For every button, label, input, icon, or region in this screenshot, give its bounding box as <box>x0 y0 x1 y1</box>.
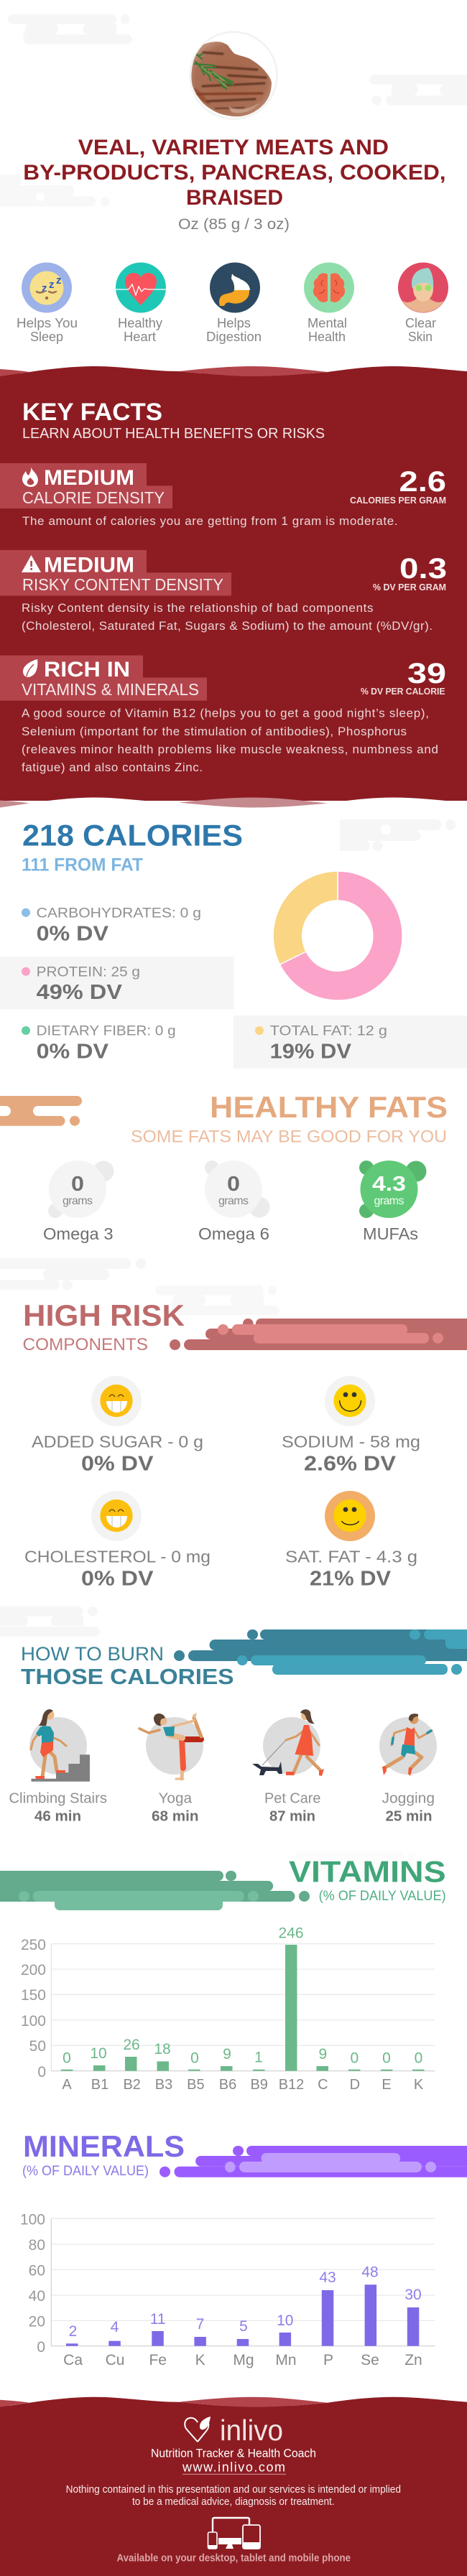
calories heading: 218 CALORIES <box>22 818 243 852</box>
title: BY-PRODUCTS, PANCREAS, COOKED, <box>23 161 446 185</box>
benefit: helps you sleep: Helps You <box>17 315 78 330</box>
bar chart: vitamins: 0 <box>190 2050 199 2067</box>
title: BRAISED <box>186 186 283 210</box>
background cloud: above burn section <box>0 1606 100 1636</box>
bar chart: vitamins: B5 <box>187 2077 205 2093</box>
bar chart: vitamins: 200 <box>21 1962 46 1979</box>
vitamins and minerals block: fatigue) and also contains Zinc. <box>22 761 203 774</box>
activity labels: 68 min <box>152 1809 198 1825</box>
activity labels: Climbing Stairs <box>9 1791 107 1807</box>
bar chart: minerals: Mg <box>233 2352 254 2368</box>
activity labels <box>9 1791 435 1825</box>
key facts subheading: LEARN ABOUT HEALTH BENEFITS OR RISKS <box>22 426 325 442</box>
decorative band: high risk <box>170 1319 467 1350</box>
benefit: healthy heart <box>116 263 166 344</box>
benefit: mental health: Mental <box>308 315 347 330</box>
bar chart: minerals: K <box>195 2352 205 2368</box>
calorie density block: CALORIE DENSITY <box>22 488 165 507</box>
calorie density block: MEDIUM <box>44 466 134 490</box>
benefit: helps you sleep: Sleep <box>30 329 63 344</box>
bar chart: vitamins: B9 <box>250 2077 268 2093</box>
availability note: Available on your desktop, tablet and mobile phone <box>116 2553 351 2565</box>
bar chart: vitamins: 10 <box>90 2045 107 2062</box>
macro: carbohydrates <box>22 906 201 945</box>
benefit: healthy heart: Heart <box>124 329 156 344</box>
fat: omega 6: Omega 6 <box>198 1224 269 1243</box>
disclaimer: Nothing contained in this presentation and our services is intended or implied <box>66 2484 401 2496</box>
bar chart: vitamins: K <box>414 2077 424 2093</box>
bar chart: vitamins: 0 <box>382 2050 391 2067</box>
decorative band: vitamins <box>0 1871 310 1910</box>
calorie density block: 2.6 <box>399 466 446 498</box>
risk: cholesterol: CHOLESTEROL - 0 mg <box>24 1548 211 1566</box>
benefit: clear skin <box>398 263 448 344</box>
benefit: helps you sleep: z <box>56 274 62 287</box>
bar chart: vitamins: 1 <box>254 2050 263 2066</box>
macro: carbohydrates: CARBOHYDRATES: 0 g <box>37 906 201 921</box>
benefit: mental health: Health <box>308 329 346 344</box>
bar chart: minerals: 5 <box>239 2318 248 2335</box>
macro: protein: PROTEIN: 25 g <box>37 964 140 980</box>
risky content density block <box>0 550 447 633</box>
macro: dietary fiber: 0% DV <box>37 1040 109 1063</box>
benefit: healthy heart: Healthy <box>118 315 163 330</box>
activity labels: Jogging <box>382 1791 435 1807</box>
fat: omega 6: 0 <box>227 1173 240 1196</box>
background cloud: right of high risk <box>155 1285 279 1316</box>
minerals heading: MINERALS <box>23 2129 185 2163</box>
risk: sodium <box>282 1376 420 1475</box>
vitamins subheading: (% OF DAILY VALUE) <box>319 1889 446 1904</box>
bar chart: vitamins: B3 <box>155 2077 172 2093</box>
tagline: Nutrition Tracker & Health Coach <box>151 2447 316 2460</box>
disclaimer <box>66 2484 401 2508</box>
vitamins and minerals block: 39 <box>407 658 446 689</box>
calorie density block: CALORIES PER GRAM <box>350 495 446 506</box>
bar chart: vitamins: A <box>62 2077 72 2093</box>
bar chart: vitamins: 0 <box>63 2050 71 2067</box>
calorie density block: The amount of calories you are getting from 1 gram is moderate. <box>22 514 398 528</box>
activity labels: Yoga <box>158 1791 193 1807</box>
vitamins heading: VITAMINS <box>289 1855 446 1889</box>
key facts heading: KEY FACTS <box>22 399 162 426</box>
risk: added sugar: ADDED SUGAR - 0 g <box>32 1433 203 1451</box>
macro: total fat: TOTAL FAT: 12 g <box>270 1024 387 1039</box>
macro: total fat <box>234 1015 467 1069</box>
activity: pet care <box>252 1709 324 1776</box>
bar chart: vitamins: 9 <box>223 2046 231 2063</box>
macro: total fat: 19% DV <box>270 1040 352 1063</box>
activity: yoga <box>139 1713 203 1779</box>
bar chart: vitamins: C <box>318 2077 328 2093</box>
risk: saturated fat <box>285 1491 417 1590</box>
risky content density block: MEDIUM <box>44 554 134 577</box>
benefit: clear skin: Clear <box>405 315 436 330</box>
bar chart: minerals: 4 <box>111 2319 119 2335</box>
vitamins and minerals block: VITAMINS & MINERALS <box>22 680 199 699</box>
bar chart: minerals: 60 <box>29 2262 45 2279</box>
burn heading: HOW TO BURN <box>21 1643 164 1665</box>
bar chart: vitamins: 246 <box>278 1925 304 1941</box>
burn heading <box>21 1643 234 1689</box>
bar chart: vitamins: B2 <box>123 2077 141 2093</box>
activity labels: 25 min <box>385 1809 433 1825</box>
bar chart: minerals: Ca <box>63 2352 83 2368</box>
risky content density block: % DV PER GRAM <box>373 582 446 592</box>
risk: sodium: 2.6% DV <box>304 1452 397 1475</box>
bar chart: minerals: 48 <box>361 2264 379 2281</box>
fat: omega 3: 0 <box>71 1173 84 1196</box>
fat: MUFAs: grams <box>374 1195 404 1207</box>
bar chart: minerals: 40 <box>29 2288 45 2305</box>
risk: cholesterol: 0% DV <box>81 1567 154 1590</box>
macro: protein: 49% DV <box>37 981 123 1004</box>
bar chart: vitamins: B6 <box>219 2077 236 2093</box>
activity: jogging <box>379 1714 437 1776</box>
serving size: Oz (85 g / 3 oz) <box>178 216 290 233</box>
benefit: helps you sleep: z <box>49 279 55 291</box>
background cloud: vitamins <box>295 1851 419 1882</box>
bar chart: minerals: 30 <box>404 2287 422 2303</box>
bar chart: minerals: Zn <box>404 2352 422 2368</box>
high risk heading: HIGH RISK <box>23 1298 185 1332</box>
vitamins and minerals block: (releaves minor health problems like muscle weakness, numbness and <box>22 743 438 756</box>
bar chart: minerals: 0 <box>37 2339 45 2356</box>
bar chart: minerals: Fe <box>149 2352 167 2368</box>
bar chart: minerals <box>20 2212 435 2368</box>
background cloud: calories <box>340 819 456 851</box>
activity labels: Pet Care <box>264 1791 320 1807</box>
calorie density block <box>0 463 446 528</box>
bar chart: minerals: Se <box>361 2352 379 2368</box>
risky content density block: RISKY CONTENT DENSITY <box>22 575 223 594</box>
risk: cholesterol <box>24 1491 211 1590</box>
fat: omega 6: grams <box>218 1195 249 1207</box>
risky content density block: Risky Content density is the relationship of bad components <box>22 601 374 615</box>
macro: protein <box>0 957 234 1010</box>
bar chart: vitamins: 0 <box>415 2050 422 2067</box>
fat: omega 3 <box>43 1161 114 1243</box>
vitamins and minerals block <box>0 656 446 774</box>
title <box>23 136 446 210</box>
bar chart: vitamins: 50 <box>29 2038 46 2055</box>
bar chart: minerals: 100 <box>20 2212 45 2228</box>
background cloud: top left <box>8 14 132 45</box>
logo: inlivo: inlivo <box>220 2414 283 2447</box>
logo: inlivo <box>185 2414 283 2447</box>
disclaimer: to be a medical advice, diagnosis or treatment. <box>132 2496 335 2508</box>
activity labels: 87 min <box>269 1809 315 1825</box>
activity labels: 46 min <box>34 1809 81 1825</box>
fat: omega 6 <box>198 1161 270 1243</box>
fat: MUFAs: MUFAs <box>363 1224 418 1243</box>
benefit: helps you sleep: z <box>42 282 47 294</box>
risky content density block: (Cholesterol, Saturated Fat, Sugars & Sodium) to the amount (%DV/gr). <box>22 619 433 633</box>
bar chart: minerals: 7 <box>196 2316 204 2333</box>
title: VEAL, VARIETY MEATS AND <box>78 136 389 159</box>
bar chart: vitamins: 250 <box>21 1937 46 1953</box>
activity: climbing stairs <box>29 1709 90 1782</box>
risk: added sugar: 0% DV <box>81 1452 154 1475</box>
background cloud: left of high risk <box>0 1258 146 1290</box>
benefit: helps digestion: Digestion <box>206 329 262 344</box>
fat: omega 3: Omega 3 <box>43 1224 114 1243</box>
donut chart <box>273 871 402 1000</box>
panel: footer <box>0 2397 467 2576</box>
bar chart: minerals: Mn <box>275 2352 297 2368</box>
bar chart: minerals: Cu <box>106 2352 124 2368</box>
healthy fats subheading: SOME FATS MAY BE GOOD FOR YOU <box>131 1127 447 1147</box>
bar chart: vitamins: 150 <box>21 1987 46 2004</box>
panel: key facts <box>0 366 467 819</box>
bar chart: minerals: 43 <box>319 2269 336 2286</box>
benefit: clear skin: Skin <box>408 329 433 344</box>
bar chart: vitamins: B12 <box>279 2077 304 2093</box>
fat: MUFAs <box>359 1161 427 1243</box>
website: www.inlivo.com <box>182 2460 285 2475</box>
high risk subheading: COMPONENTS <box>23 1335 148 1354</box>
risk: sodium: SODIUM - 58 mg <box>282 1433 420 1451</box>
vitamins and minerals block: % DV PER CALORIE <box>361 686 445 697</box>
bar chart: vitamins: 0 <box>351 2050 359 2067</box>
macro: dietary fiber <box>22 1024 176 1063</box>
healthy fats heading: HEALTHY FATS <box>210 1090 448 1124</box>
risk: added sugar <box>32 1376 203 1475</box>
bar chart: vitamins: 26 <box>123 2037 140 2053</box>
bar chart: minerals: 80 <box>29 2237 45 2254</box>
benefit: helps you sleep <box>17 263 78 344</box>
risk: saturated fat: 21% DV <box>310 1567 392 1590</box>
calories from fat: 111 FROM FAT <box>22 855 143 875</box>
vitamins and minerals block: A good source of Vitamin B12 (helps you to get a good night’s sleep), <box>22 707 429 720</box>
bar chart: vitamins: 9 <box>319 2046 327 2063</box>
benefit: helps digestion: Helps <box>217 315 251 330</box>
risky content density block: 0.3 <box>399 553 447 585</box>
background cloud: top right <box>369 75 467 105</box>
bar chart: minerals: 2 <box>69 2323 77 2340</box>
bar chart: minerals: 10 <box>277 2312 293 2329</box>
macro: dietary fiber: DIETARY FIBER: 0 g <box>37 1024 176 1039</box>
bar chart: vitamins: B1 <box>91 2077 108 2093</box>
benefit: helps digestion <box>206 263 262 344</box>
vitamins and minerals block: Selenium (important for the stimulation of antibodies), Phosphorus <box>22 725 407 738</box>
bar chart: vitamins <box>21 1925 435 2093</box>
decorative band: minerals <box>159 2146 467 2177</box>
fat: MUFAs: 4.3 <box>372 1173 406 1196</box>
bar chart: minerals: 20 <box>29 2314 45 2330</box>
bar chart: vitamins: 18 <box>154 2041 171 2057</box>
decorative band: burn <box>174 1629 467 1675</box>
fat: omega 3: grams <box>63 1195 93 1207</box>
bar chart: minerals: P <box>323 2352 333 2368</box>
risk: saturated fat: SAT. FAT - 4.3 g <box>285 1548 417 1566</box>
vitamins and minerals block: RICH IN <box>44 658 130 682</box>
burn heading: THOSE CALORIES <box>21 1664 234 1689</box>
minerals subheading: (% OF DAILY VALUE) <box>22 2164 149 2179</box>
bar chart: vitamins: D <box>350 2077 360 2093</box>
macro: carbohydrates: 0% DV <box>37 922 109 945</box>
bar chart: vitamins: E <box>382 2077 392 2093</box>
bar chart: vitamins: 0 <box>37 2064 46 2080</box>
bar chart: vitamins: 100 <box>21 2013 46 2029</box>
background cloud: title left <box>0 175 110 207</box>
decorative band: healthy fats <box>0 1096 82 1126</box>
benefit: mental health <box>304 263 354 344</box>
bar chart: minerals: 11 <box>150 2311 166 2328</box>
hero image: steak <box>190 32 277 119</box>
icon: devices <box>208 2518 260 2549</box>
